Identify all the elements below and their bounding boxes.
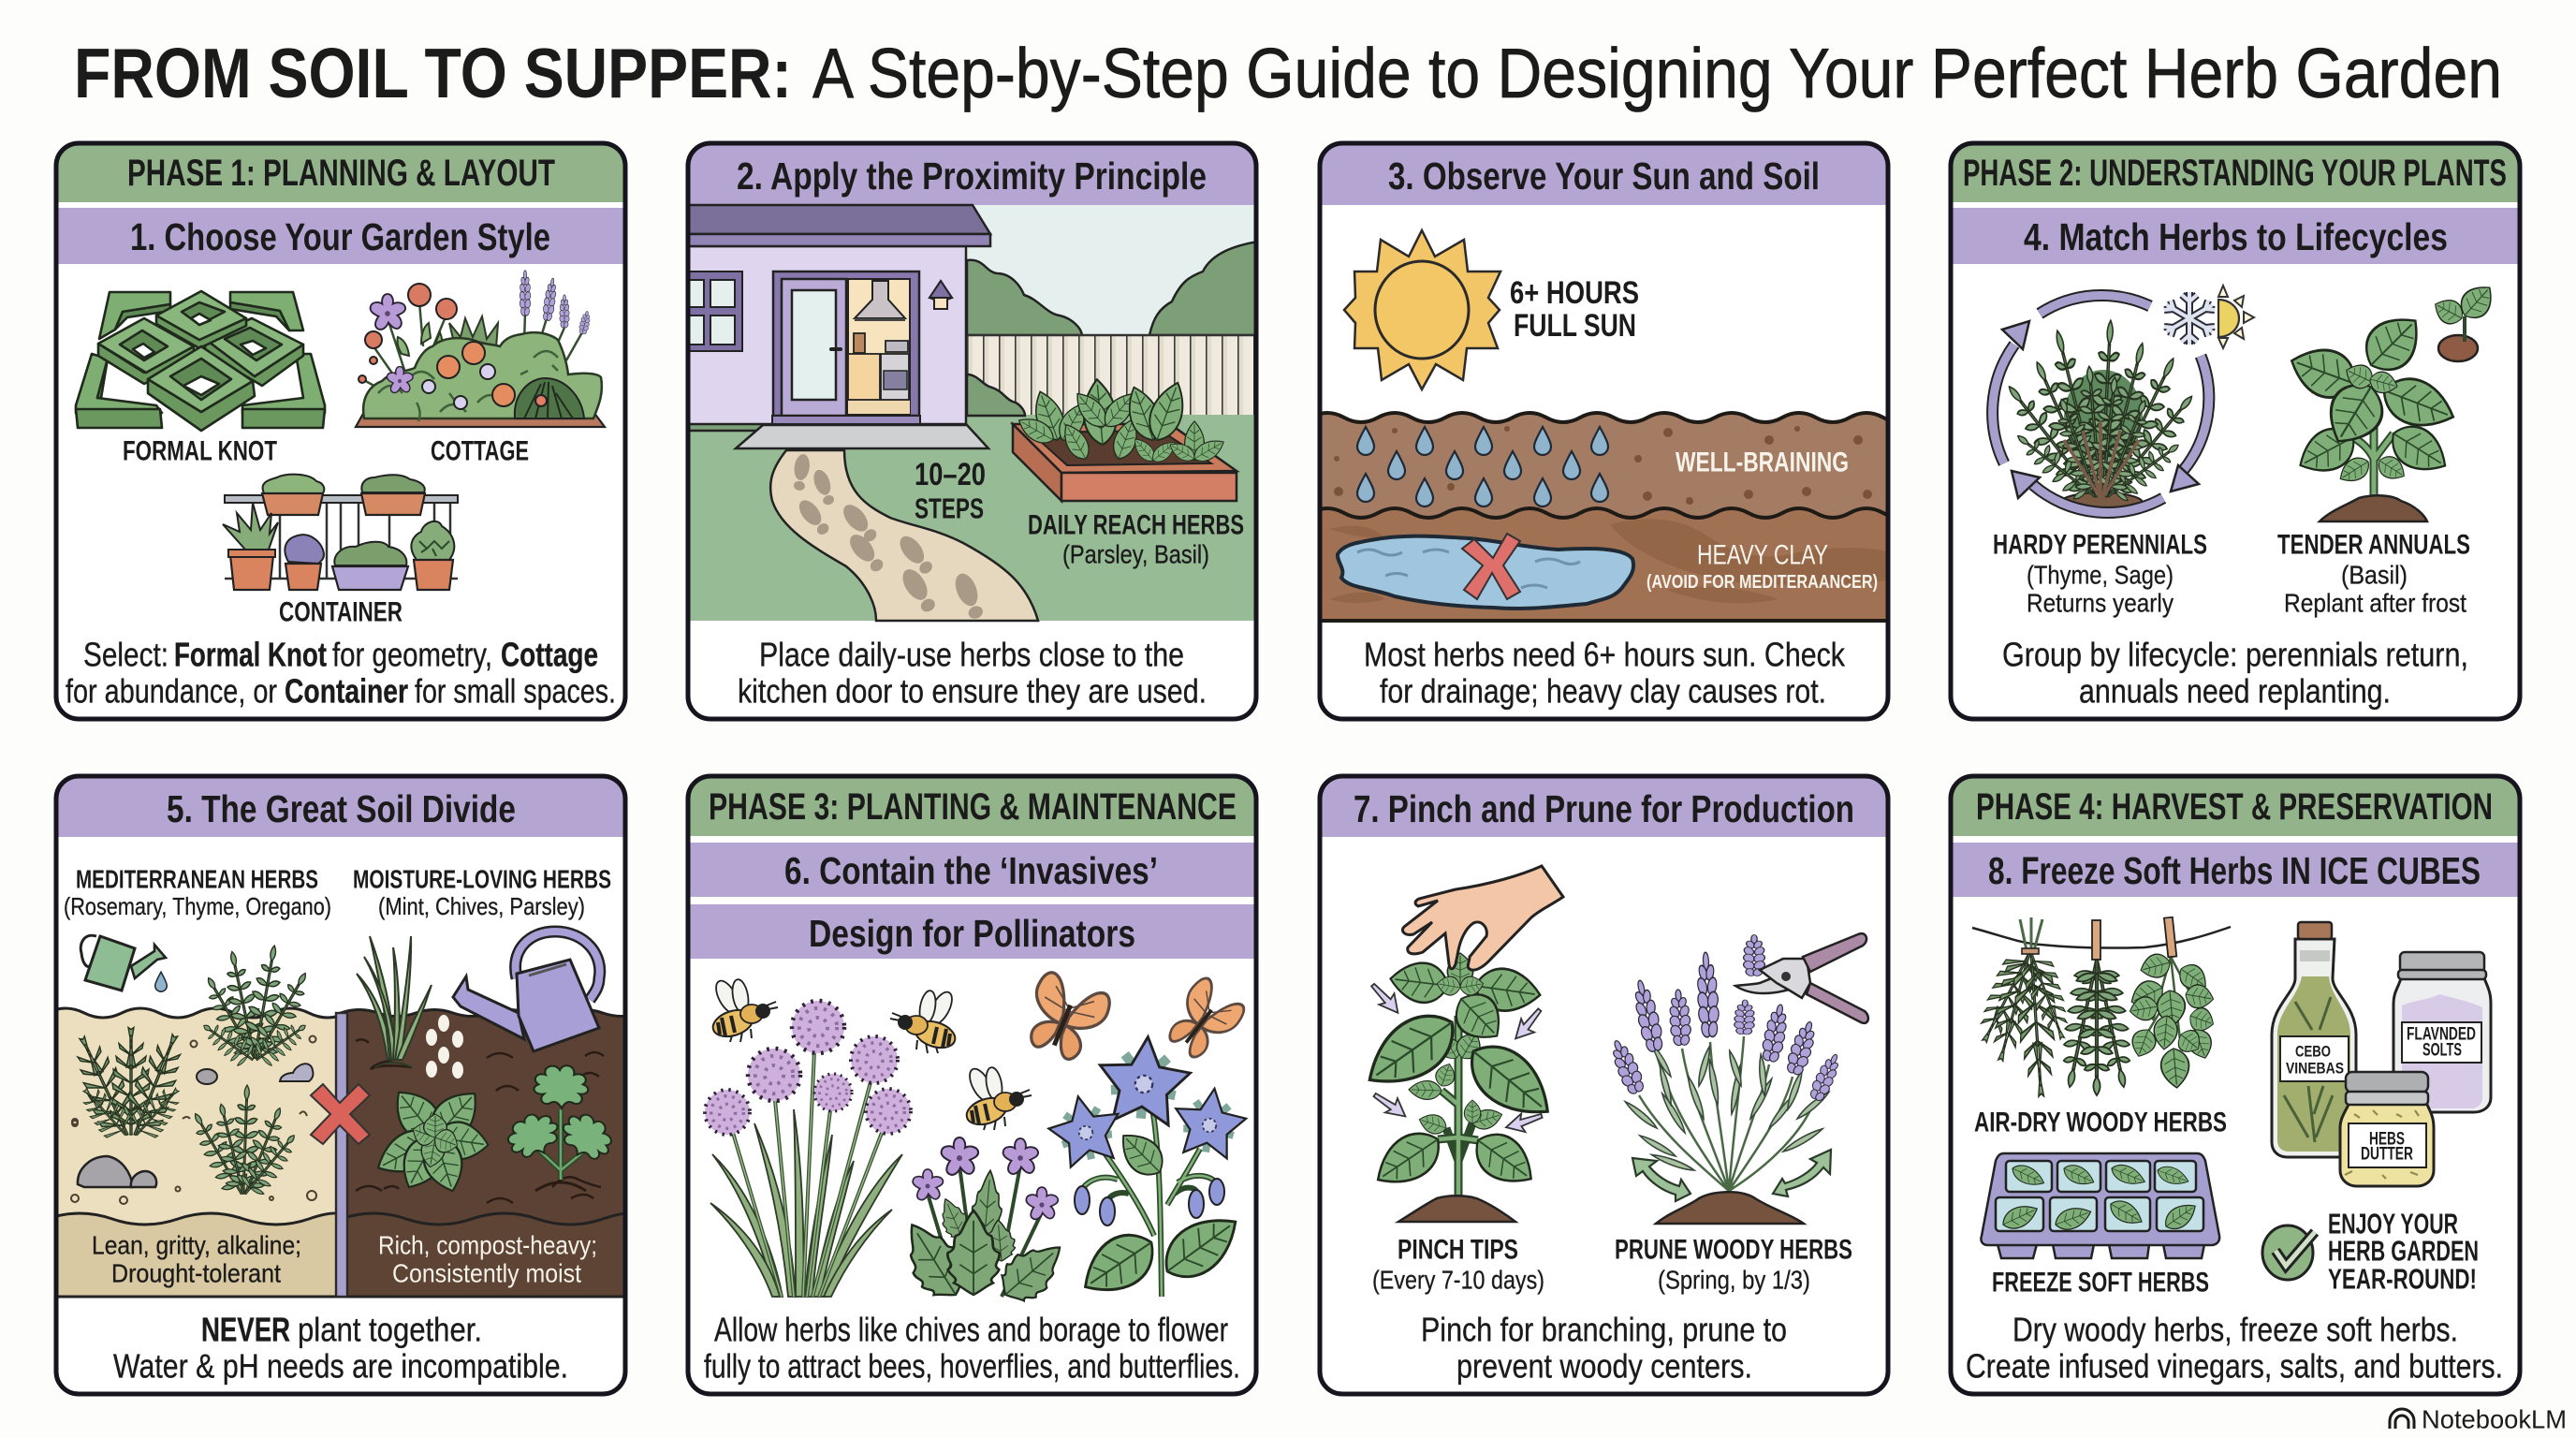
illustration: phacelia plant: [891, 1137, 1075, 1312]
caption: kitchen door to ensure they are used.: [738, 672, 1207, 710]
label: pinch tips: PINCH TIPS: [1398, 1234, 1518, 1266]
icon: perennial thyme in cycle arrows: [1993, 295, 2209, 513]
step 2 heading: 2. Apply the Proximity Principle: [737, 154, 1207, 198]
icon: cottage garden: [356, 271, 605, 427]
caption: for geometry,: [332, 635, 492, 674]
label: lean gritty: Lean, gritty, alkaline;: [92, 1230, 301, 1260]
panel: 6 planting and pollinators: [686, 774, 1258, 1394]
icon: herb butter jar: DUTTER: [2361, 1144, 2413, 1165]
step 4 heading: 4. Match Herbs to Lifecycles: [2024, 215, 2448, 258]
caption: [2002, 635, 2468, 710]
caption: [738, 635, 1207, 710]
caption: [704, 1311, 1240, 1386]
step 4 heading: [1949, 208, 2522, 264]
caption: Cottage: [501, 635, 598, 674]
design for pollinators heading: [686, 904, 1258, 959]
caption: [113, 1311, 568, 1386]
label: 6+ hours full sun: FULL SUN: [1514, 308, 1636, 344]
icon: mint: [370, 1080, 490, 1196]
step 5 heading: 5. The Great Soil Divide: [167, 787, 516, 830]
label: mediterranean herbs: (Rosemary, Thyme, Oregano): [64, 892, 331, 920]
notebooklm logo: NotebookLM: [2422, 1404, 2567, 1434]
step 7 heading: 7. Pinch and Prune for Production: [1354, 787, 1854, 830]
label: pinch tips: [1372, 1234, 1544, 1294]
label: moisture-loving herbs: [353, 865, 611, 920]
caption: Allow herbs like chives and borage to flower: [714, 1311, 1228, 1348]
caption: for drainage; heavy clay causes rot.: [1380, 672, 1826, 710]
caption: for small spaces.: [415, 672, 616, 710]
label: heavy clay: (AVOID FOR MEDITERAANCER): [1647, 572, 1878, 593]
label: freeze soft herbs: FREEZE SOFT HERBS: [1992, 1268, 2209, 1298]
divider and red x: [311, 1013, 370, 1297]
caption: Group by lifecycle: perennials return,: [2002, 635, 2468, 674]
caption: fully to attract bees, hoverflies, and butterflies.: [704, 1346, 1240, 1386]
title: [74, 34, 2502, 112]
icon: butterfly right: [1159, 975, 1248, 1066]
phase 4 banner: [1949, 774, 2522, 836]
step 8 heading: [1949, 843, 2522, 897]
caption: annuals need replanting.: [2079, 672, 2391, 710]
label: daily reach herbs: DAILY REACH HERBS: [1028, 509, 1244, 541]
panel: 2 proximity principle: [686, 141, 1258, 719]
illustration: borage plant: [1044, 1033, 1250, 1307]
icon: purple watering can: [453, 932, 600, 1051]
callout: enjoy your herb garden: [2328, 1208, 2479, 1296]
icon: sun: [1344, 230, 1500, 389]
caption: plant together.: [298, 1311, 482, 1348]
label: air-dry woody herbs: AIR-DRY WOODY HERBS: [1974, 1107, 2227, 1138]
icon: bee left: [710, 977, 778, 1042]
label: heavy clay: HEAVY CLAY: [1697, 539, 1828, 571]
caption: [1421, 1311, 1787, 1386]
label: hardy perennials: [1993, 530, 2207, 618]
caption: [1364, 635, 1846, 710]
caption: [1966, 1311, 2503, 1386]
icon: snowflake and sun: [2164, 286, 2254, 348]
label: mediterranean herbs: MEDITERRANEAN HERBS: [76, 865, 318, 893]
icon: drying herb bundles: [1968, 917, 2231, 1097]
label: hardy perennials: (Thyme, Sage): [2027, 560, 2174, 590]
phase 1 banner: PHASE 1: PLANNING & LAYOUT: [127, 153, 555, 194]
title: FROM SOIL TO SUPPER:: [74, 34, 792, 112]
label: tender annuals: TENDER ANNUALS: [2277, 530, 2470, 560]
label: cottage: COTTAGE: [431, 436, 529, 466]
caption: Pinch for branching, prune to: [1421, 1311, 1787, 1348]
label: daily reach herbs: [1028, 509, 1244, 569]
icon: butterfly left: [1017, 969, 1114, 1066]
icon: small green watering can: [80, 935, 167, 991]
callout: enjoy your herb garden: YEAR-ROUND!: [2328, 1262, 2477, 1296]
illustration: soil layers: [1310, 413, 1917, 621]
label: rich compost: [378, 1230, 597, 1288]
icon: hand pinching: [1402, 866, 1563, 970]
icon: basil plant being pinched: [1354, 953, 1563, 1222]
icon: secateurs: [1735, 933, 1868, 1023]
label: prune woody herbs: PRUNE WOODY HERBS: [1615, 1234, 1852, 1266]
caption: Formal Knot: [174, 635, 327, 674]
caption: Most herbs need 6+ hours sun. Check: [1364, 635, 1846, 674]
step 3 heading: [1318, 141, 1890, 205]
label: 10-20 steps: STEPS: [915, 492, 984, 524]
caption: Water & pH needs are incompatible.: [113, 1346, 568, 1386]
panel: 1 choose your garden style: [54, 141, 627, 719]
label: rich compost: Rich, compost-heavy;: [378, 1230, 597, 1260]
icon: ice cube tray: [1981, 1153, 2219, 1258]
step 6 heading: [686, 843, 1258, 897]
icon: herb butter jar: [2340, 1072, 2434, 1186]
step 1 heading: [54, 208, 627, 264]
step 2 heading: [686, 141, 1258, 205]
label: lean gritty: Drought-tolerant: [111, 1258, 281, 1288]
icon: bee lower: [963, 1065, 1032, 1130]
callout: enjoy your herb garden: ENJOY YOUR: [2328, 1208, 2458, 1240]
icon: flavored salts jar: FLAVNDED: [2407, 1024, 2476, 1045]
panel: 8 harvest and preservation: [1949, 774, 2522, 1394]
label: well-draining: WELL-BRAINING: [1676, 448, 1849, 477]
step 6 heading: 6. Contain the ‘Invasives’: [784, 849, 1158, 892]
label: hardy perennials: HARDY PERENNIALS: [1993, 530, 2207, 560]
caption: Place daily-use herbs close to the: [759, 635, 1184, 674]
step 1 heading: 1. Choose Your Garden Style: [130, 215, 550, 258]
caption: Container: [285, 672, 408, 710]
icon: bee middle: [890, 989, 959, 1053]
label: rich compost: Consistently moist: [392, 1258, 581, 1288]
illustration: rich moist side: [341, 1009, 640, 1297]
caption: for abundance, or: [66, 672, 277, 710]
illustration: chives clump: [705, 1001, 911, 1297]
icon: parsley: [501, 1065, 619, 1191]
label: prune woody herbs: (Spring, by 1/3): [1658, 1266, 1810, 1294]
label: hardy perennials: Returns yearly: [2027, 588, 2174, 618]
phase 3 banner: PHASE 3: PLANTING & MAINTENANCE: [709, 786, 1237, 828]
icon: flavored salts jar: [2393, 952, 2491, 1112]
label: 10-20 steps: [915, 457, 986, 524]
label: mediterranean herbs: [64, 865, 331, 920]
icon: container garden on balcony: [223, 475, 458, 590]
callout: enjoy your herb garden: HERB GARDEN: [2328, 1234, 2479, 1268]
panel: 5 great soil divide: [47, 774, 640, 1394]
icon: herb vinegar bottle: VINEBAS: [2286, 1060, 2344, 1077]
step 7 heading: [1318, 774, 1890, 837]
phase 2 banner: [1949, 141, 2522, 202]
caption: Dry woody herbs, freeze soft herbs.: [2012, 1311, 2458, 1348]
label: 6+ hours full sun: [1510, 275, 1639, 344]
label: pinch tips: (Every 7-10 days): [1372, 1266, 1544, 1294]
label: 10-20 steps: 10–20: [915, 457, 986, 492]
icon: flavored salts jar: SOLTS: [2422, 1041, 2462, 1060]
label: tender annuals: [2277, 530, 2470, 618]
phase 3 banner: [686, 774, 1258, 836]
icon: white water drops: [426, 1015, 463, 1078]
label: tender annuals: Replant after frost: [2284, 588, 2466, 618]
label: prune woody herbs: [1615, 1234, 1852, 1294]
panel: 4 lifecycles: [1949, 141, 2522, 719]
step 3 heading: 3. Observe Your Sun and Soil: [1388, 154, 1820, 198]
icon: chives: [357, 936, 432, 1067]
icon: lavender bush: [1605, 934, 1845, 1224]
label: tender annuals: (Basil): [2341, 560, 2408, 590]
icon: herb vinegar bottle: CEBO: [2295, 1043, 2331, 1060]
label: moisture-loving herbs: MOISTURE-LOVING HERBS: [353, 865, 611, 893]
icon: tender basil with seedling: [2284, 278, 2500, 521]
label: heavy clay: [1647, 539, 1878, 593]
caption: NEVER: [201, 1311, 290, 1348]
icon: formal knot garden: [76, 291, 325, 431]
illustration: backyard kitchen garden: [686, 205, 1258, 622]
caption: prevent woody centers.: [1456, 1346, 1752, 1386]
icon: herb butter jar: HEBS: [2369, 1129, 2405, 1150]
illustration: sandy mediterranean side: [47, 943, 346, 1297]
label: formal knot: FORMAL KNOT: [123, 436, 277, 466]
label: lean gritty: [92, 1230, 301, 1288]
panel: 3 sun and soil: [1310, 141, 1917, 719]
icon: herb vinegar bottle: [2272, 922, 2356, 1157]
icon: check mark: [2262, 1225, 2315, 1280]
label: container: CONTAINER: [279, 597, 402, 627]
caption: [66, 635, 616, 710]
label: 6+ hours full sun: 6+ HOURS: [1510, 275, 1639, 311]
caption: Select:: [83, 635, 168, 674]
design for pollinators heading: Design for Pollinators: [809, 912, 1135, 955]
phase 1 banner: [54, 141, 627, 202]
label: daily reach herbs: (Parsley, Basil): [1062, 539, 1209, 569]
label: moisture-loving herbs: (Mint, Chives, Parsley): [378, 892, 585, 920]
step 5 heading: [54, 774, 627, 837]
panel: 7 pinch and prune: [1318, 774, 1890, 1394]
